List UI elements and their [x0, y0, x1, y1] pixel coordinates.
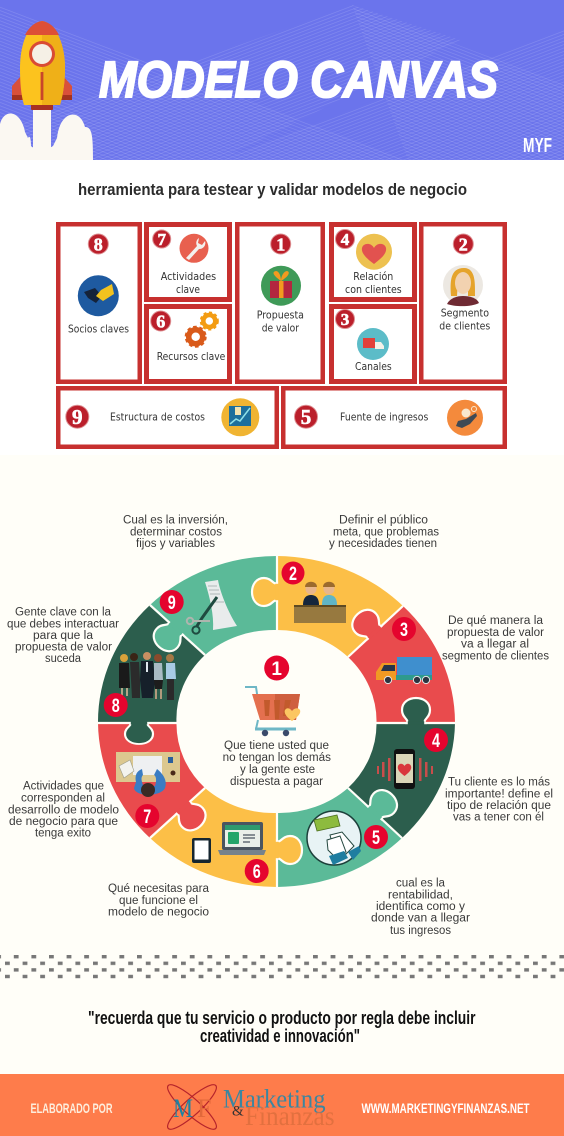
panel: business model canvas grid: [58, 224, 505, 447]
text block: activities: tenga exito: [35, 828, 91, 840]
text block: center, segment 1: [223, 740, 331, 788]
text block: customer relationship: vas a tener con él: [453, 812, 544, 824]
panel: actividades clave: [146, 224, 230, 300]
panel: propuesta de valor: Propuesta: [257, 309, 304, 321]
text block: activities: [8, 780, 119, 840]
text block: target audience: meta, que problemas: [333, 526, 439, 538]
text block: customer relationship: tipo de relación que: [447, 800, 551, 812]
panel: propuesta de valor: de valor: [262, 322, 300, 334]
segment 3: [348, 606, 455, 723]
text block: channels: [442, 615, 549, 662]
panel: estructura de costos: Estructura de costos: [110, 412, 205, 424]
text block: revenue: identifica como y: [376, 901, 465, 913]
panel: estructura de costos: [58, 388, 277, 447]
puzzle tab of segment 3: [347, 605, 385, 642]
panel: relacion con clientes: [332, 224, 414, 300]
panel: segmento de clientes: Segmento: [441, 307, 489, 319]
puzzle tab of segment 5: [365, 785, 402, 822]
icon: laptop and tablet: [192, 822, 266, 863]
panel: relacion con clientes: Relación: [353, 271, 393, 283]
text block: center, segment 1: dispuesta a pagar: [230, 776, 323, 788]
icon: delivery truck: [376, 657, 432, 684]
segment 6: [150, 788, 277, 887]
panel: recursos clave: 6: [156, 312, 165, 332]
text block: center, segment 1: Que tiene usted que: [224, 740, 329, 752]
panel: socios claves: Socios claves: [68, 324, 129, 336]
panel: canales: [332, 306, 414, 382]
panel: actividades clave: 7: [157, 230, 166, 249]
panel: recursos clave: [146, 306, 230, 382]
badge 5: 5: [372, 828, 380, 849]
text block: center, segment 1: no tengan los demás: [223, 752, 331, 764]
badge 1: [264, 656, 289, 680]
badge 2: [282, 562, 304, 585]
text block: resources: que funcione el: [119, 895, 198, 907]
puzzle tab of segment 2: [252, 578, 277, 606]
icon: phone with heart: [377, 749, 433, 789]
panel: actividades clave: Actividades: [161, 271, 216, 283]
panel: propuesta de valor: [237, 224, 323, 382]
text block: customer relationship: Tu cliente es lo más: [448, 777, 550, 789]
puzzle tab of segment 4: [402, 698, 430, 723]
footer credit text: ELABORADO POR: [30, 1100, 112, 1116]
badge 5: [364, 825, 388, 849]
text block: channels: segmento de clientes: [442, 650, 549, 662]
text block: revenue: tus ingresos: [390, 925, 451, 937]
number badges on the ring: [104, 562, 448, 883]
badge 8: [104, 693, 128, 717]
text block: revenue: cual es la: [396, 878, 446, 890]
brand tag MYF: MYF: [523, 135, 552, 157]
text block: target audience: y necesidades tienen: [329, 538, 437, 550]
text block: partners: [7, 606, 119, 665]
icon: hands with money: [307, 811, 361, 865]
title: MODELO CANVAS: [99, 51, 498, 108]
segment 5: [277, 788, 402, 887]
icon: team of people: [119, 652, 176, 700]
logo: Marketing & Finanzas: Finanzas: [245, 1101, 334, 1131]
panel: estructura de costos: 9: [72, 405, 83, 429]
badge 7: [135, 804, 159, 828]
icon: shopping cart with heart: [245, 687, 300, 736]
icon: receipt and scissors: [187, 580, 237, 634]
panel: header banner: [0, 0, 564, 160]
text block: revenue: donde van a llegar: [371, 913, 470, 925]
text block: target audience: Definir el público: [339, 514, 428, 526]
text block: channels: va a llegar al: [461, 639, 529, 651]
text block: costs: Cual es la inversión,: [123, 514, 228, 526]
text block: partners: suceda: [45, 653, 82, 665]
badge 6: [245, 859, 269, 883]
quote: creatividad e innovación": [200, 1026, 360, 1046]
logo: Marketing & Finanzas: F: [197, 1094, 211, 1123]
text block: partners: Gente clave con la: [15, 606, 112, 618]
panel: footer: [0, 1074, 564, 1136]
logo: Marketing & Finanzas: Marketing: [223, 1085, 326, 1114]
text block: resources: [108, 883, 210, 919]
panel: canales: 3: [341, 310, 349, 329]
panel: actividades clave: clave: [176, 284, 200, 296]
text block: revenue: rentabilidad,: [388, 890, 453, 902]
text block: activities: corresponden al: [21, 793, 105, 805]
puzzle tab of segment 8: [125, 723, 153, 744]
badge 9: [160, 590, 184, 614]
badge 9: 9: [168, 593, 176, 614]
text block: partners: que debes interactuar: [7, 619, 119, 631]
dotted divider band: [0, 955, 564, 979]
badge 4: 4: [432, 731, 440, 752]
text block: resources: Qué necesitas para: [108, 883, 210, 895]
text block: activities: Actividades que: [23, 780, 104, 792]
badge 6: 6: [253, 862, 261, 883]
panel: fuente de ingresos: Fuente de ingresos: [340, 412, 428, 424]
puzzle tab of segment 7: [173, 798, 211, 836]
chart: puzzle ring of nine blocks: [98, 556, 455, 887]
segment 8: [98, 605, 205, 723]
panel: propuesta de valor: 1: [276, 234, 285, 254]
icon: rocket with smoke clouds: [0, 21, 93, 160]
text block: target audience: [329, 514, 439, 550]
puzzle tab of segment 6: [277, 836, 302, 864]
text block: center, segment 1: y la gente este: [240, 764, 315, 776]
panel: fuente de ingresos: 5: [301, 405, 311, 429]
panel: recursos clave: Recursos clave: [157, 351, 225, 363]
text block: costs: fijos y variables: [136, 538, 215, 550]
panel: segmento de clientes: 2: [459, 234, 468, 254]
badge 1: 1: [271, 659, 282, 680]
panel: canales: Canales: [355, 361, 392, 373]
text block: activities: de negocio para que: [9, 816, 118, 828]
panel: relacion con clientes: con clientes: [345, 284, 402, 296]
panel: segmento de clientes: de clientes: [439, 320, 490, 332]
logo: Marketing & Finanzas: &: [232, 1104, 244, 1120]
panel: socios claves: 8: [94, 234, 103, 254]
text block: costs: determinar costos: [130, 526, 222, 538]
badge 3: 3: [400, 620, 408, 641]
badge 3: [392, 617, 416, 641]
text block: revenue: [371, 878, 470, 937]
icon: two people at desk: [294, 582, 346, 623]
quote: [88, 1008, 476, 1046]
text block: customer relationship: importante! define el: [445, 788, 553, 800]
text block: channels: propuesta de valor: [447, 627, 544, 639]
logo: Marketing & Finanzas: M: [173, 1094, 193, 1123]
text block: partners: propuesta de valor: [15, 642, 112, 654]
segment 4: [348, 723, 455, 838]
badge 8: 8: [112, 696, 120, 717]
panel: relacion con clientes: 4: [341, 230, 350, 249]
text block: channels: De qué manera la: [448, 615, 544, 627]
badge 7: 7: [143, 807, 151, 828]
panel: fuente de ingresos: [283, 388, 505, 447]
text block: partners: para que la: [33, 630, 94, 642]
badge 4: [424, 728, 448, 752]
text block: resources: modelo de negocio: [108, 907, 209, 919]
subtitle: herramienta para testear y validar modelos de negocio: [78, 180, 467, 199]
logo: Marketing & Finanzas: [163, 1080, 334, 1134]
puzzle tab of segment 9: [149, 619, 186, 656]
badge 2: 2: [289, 564, 297, 585]
text block: activities: desarrollo de modelo: [8, 804, 119, 816]
panel: socios claves: [58, 224, 140, 382]
panel: segmento de clientes: [421, 224, 505, 382]
segment 2: [277, 556, 403, 657]
segment 9: [150, 556, 277, 655]
text block: customer relationship: [445, 777, 553, 824]
segment 7: [98, 723, 205, 838]
text block: costs: [123, 514, 228, 550]
icon: person at desk from above: [116, 752, 180, 797]
